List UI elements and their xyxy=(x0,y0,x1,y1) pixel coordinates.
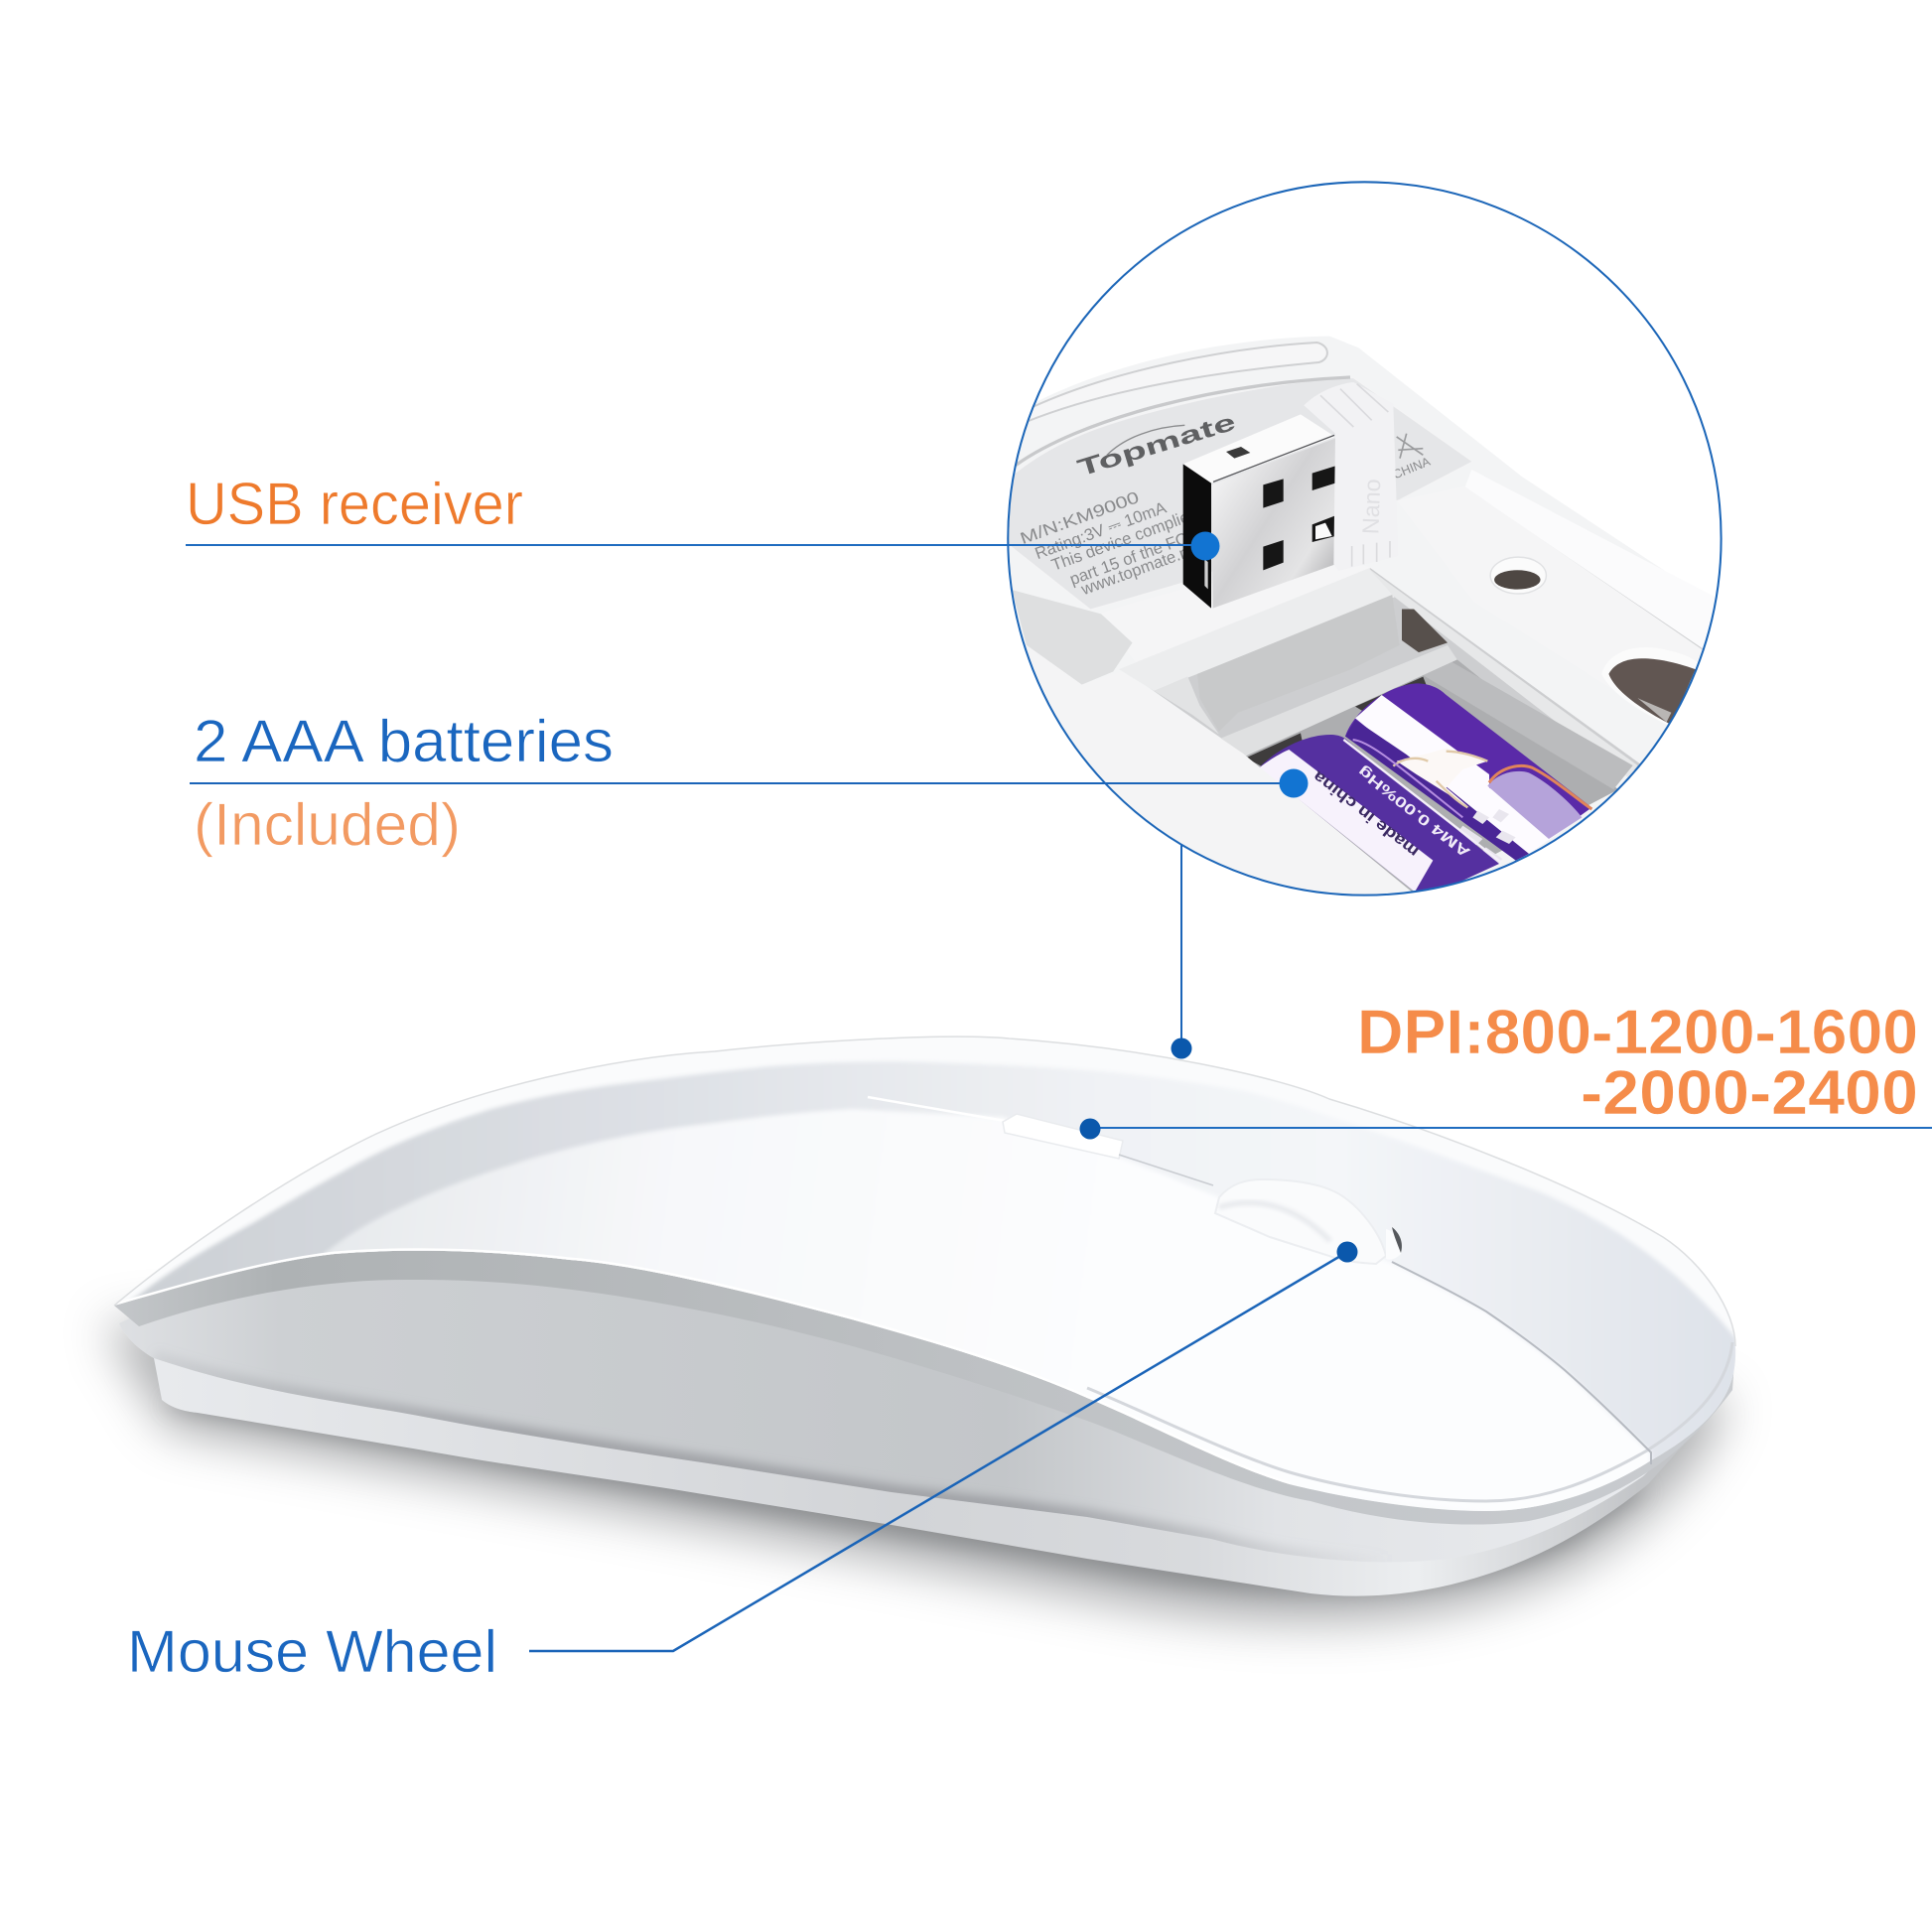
recycling mark xyxy=(1397,434,1423,459)
USB receiver leader line xyxy=(186,544,1205,546)
lower right plate xyxy=(1463,488,1702,651)
batteries, crop coordinates xyxy=(1246,677,1591,892)
callout: USB receiver xyxy=(186,471,1219,560)
sensor window xyxy=(1608,658,1696,723)
included note: (Included) xyxy=(194,791,461,858)
battery bay xyxy=(1119,568,1642,896)
lens outline xyxy=(1008,182,1722,896)
connector: lens to mouse xyxy=(1172,845,1191,1058)
mouse wheel dot xyxy=(1336,1241,1358,1263)
mouse side bevel band xyxy=(114,1191,1735,1525)
left bevel strip xyxy=(1012,590,1133,685)
DPI text second line: -2000-2400 xyxy=(1581,1058,1918,1128)
lower body flap xyxy=(1219,739,1411,892)
label text lines: M/N:KM9000 xyxy=(1018,487,1142,548)
mouse illustration xyxy=(99,1023,1767,1621)
screw hole xyxy=(1490,557,1546,594)
label text lines: www.topmate.net xyxy=(1078,537,1204,599)
label text lines: part 15 of the FCC xyxy=(1067,524,1201,589)
DPI dot xyxy=(1080,1118,1100,1140)
underside body xyxy=(1009,336,1668,880)
callout: DPI xyxy=(1080,998,1932,1140)
seam line to wheel xyxy=(1119,1155,1213,1185)
DPI leader line xyxy=(1090,1127,1932,1129)
seam line to DPI button xyxy=(868,1097,1005,1121)
mouse ground shadow xyxy=(104,1311,1727,1621)
rail strip xyxy=(1026,343,1327,422)
USB receiver xyxy=(1183,382,1398,609)
mouse wheel leader line xyxy=(529,1252,1347,1651)
origin text: CHINA xyxy=(1391,455,1433,482)
product label xyxy=(1003,378,1472,610)
back battery xyxy=(1345,683,1591,864)
label text lines xyxy=(1021,492,1183,594)
scroll wheel xyxy=(1215,1179,1402,1264)
DPI button xyxy=(1003,1114,1123,1159)
receiver cap xyxy=(1304,382,1398,571)
battery print: made in china xyxy=(1310,767,1422,860)
logo swoosh xyxy=(1107,425,1184,455)
mouse base xyxy=(119,1271,1732,1596)
label text lines: Rating:3V ⎓ 10mA xyxy=(1033,497,1170,563)
mouse top shell xyxy=(116,1060,1735,1511)
DPI text: DPI:800-1200-1600 xyxy=(1357,998,1918,1067)
battery print second line: AM4 0.00%Hg xyxy=(1355,762,1473,860)
mouse wheel label: Mouse Wheel xyxy=(127,1618,497,1685)
rail line xyxy=(1016,377,1350,465)
label text lines: This device complies xyxy=(1049,504,1199,575)
cap text: Nano xyxy=(1357,479,1385,535)
white ridge xyxy=(1464,470,1725,655)
callout: mouse wheel xyxy=(127,1241,1358,1685)
panel: magnified underside circle xyxy=(993,182,1733,900)
battery contact shadows xyxy=(1246,677,1427,767)
callout: batteries xyxy=(190,708,1309,858)
batteries label: 2 AAA batteries xyxy=(194,708,614,774)
top outline highlight xyxy=(114,1036,1735,1346)
underside scene xyxy=(993,337,1733,900)
USB receiver label: USB receiver xyxy=(186,471,523,537)
USB receiver dot xyxy=(1191,532,1219,560)
batteries dot xyxy=(1279,768,1309,798)
front battery xyxy=(1259,735,1501,892)
label and receiver, crop coordinates xyxy=(1003,343,1472,610)
button seam xyxy=(1392,1262,1651,1464)
logo text: Topmate xyxy=(1074,409,1239,483)
recess under the receiver xyxy=(1099,559,1373,664)
batteries leader line xyxy=(190,782,1294,784)
mouse side wall xyxy=(119,1280,1647,1562)
